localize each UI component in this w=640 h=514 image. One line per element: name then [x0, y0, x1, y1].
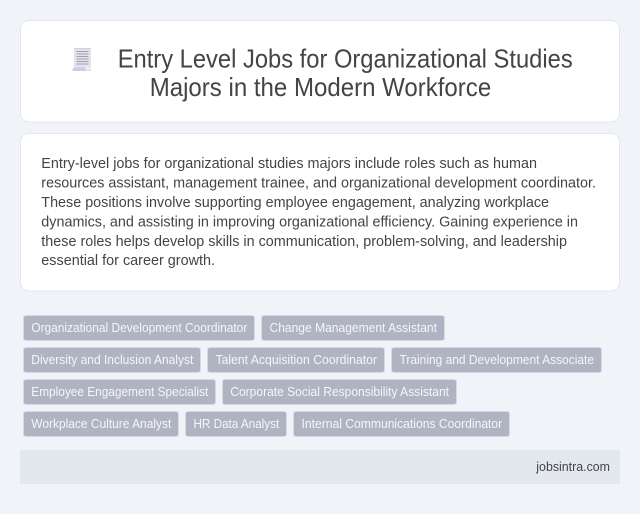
- description text: these roles helps develop skills in communication, problem-solving, and leadership: [41, 233, 567, 250]
- tag: HR Data Analyst: HR Data Analyst: [194, 416, 280, 431]
- tag: Training and Development Associate: [392, 348, 602, 372]
- description text: dynamics, and assisting in improving organizational efficiency. Gaining experience in: [41, 214, 578, 230]
- tag: Training and Development Associate: Training and Development Associate: [400, 352, 594, 367]
- tag: Employee Engagement Specialist: Employee Engagement Specialist: [31, 384, 209, 399]
- description text: resources assistant, management trainee, and organizational development coordinator.: [41, 174, 596, 192]
- icon: document scroll: [72, 48, 91, 71]
- footer: [20, 450, 620, 484]
- description text: These positions involve supporting employee engagement, analyzing workplace: [41, 194, 549, 211]
- footer source text: jobsintra.com: [535, 459, 610, 474]
- tag: Corporate Social Responsibility Assistant: Corporate Social Responsibility Assistant: [230, 384, 449, 399]
- tag: Organizational Development Coordinator: Organizational Development Coordinator: [31, 320, 248, 335]
- tag: Workplace Culture Analyst: [24, 412, 178, 436]
- tag: Change Management Assistant: [262, 316, 444, 340]
- title text: Entry Level Jobs for Organizational Studies: [118, 43, 573, 73]
- title text: [118, 43, 573, 102]
- tag: Internal Communications Coordinator: [294, 412, 510, 436]
- panel: description card: [20, 134, 620, 291]
- title text: Majors in the Modern Workforce: [150, 72, 491, 102]
- tag: Internal Communications Coordinator: Internal Communications Coordinator: [302, 416, 503, 431]
- tag: Workplace Culture Analyst: Workplace Culture Analyst: [31, 416, 172, 431]
- description text: essential for career growth.: [41, 252, 215, 269]
- description text: Entry-level jobs for organizational studies majors include roles such as human: [41, 155, 537, 172]
- tag: Organizational Development Coordinator: [24, 316, 254, 340]
- tag: Diversity and Inclusion Analyst: Diversity and Inclusion Analyst: [31, 352, 194, 367]
- tag: Talent Acquisition Coordinator: Talent Acquisition Coordinator: [216, 352, 378, 367]
- tag: Employee Engagement Specialist: [24, 380, 216, 404]
- panel: title card: [20, 20, 620, 122]
- tag: Change Management Assistant: Change Management Assistant: [270, 320, 437, 335]
- job tags: [24, 316, 602, 436]
- tag: HR Data Analyst: [186, 412, 286, 436]
- tag: Talent Acquisition Coordinator: [208, 348, 384, 372]
- tag: Corporate Social Responsibility Assistant: [222, 380, 456, 404]
- description text: [41, 155, 596, 269]
- tag: Diversity and Inclusion Analyst: [24, 348, 200, 372]
